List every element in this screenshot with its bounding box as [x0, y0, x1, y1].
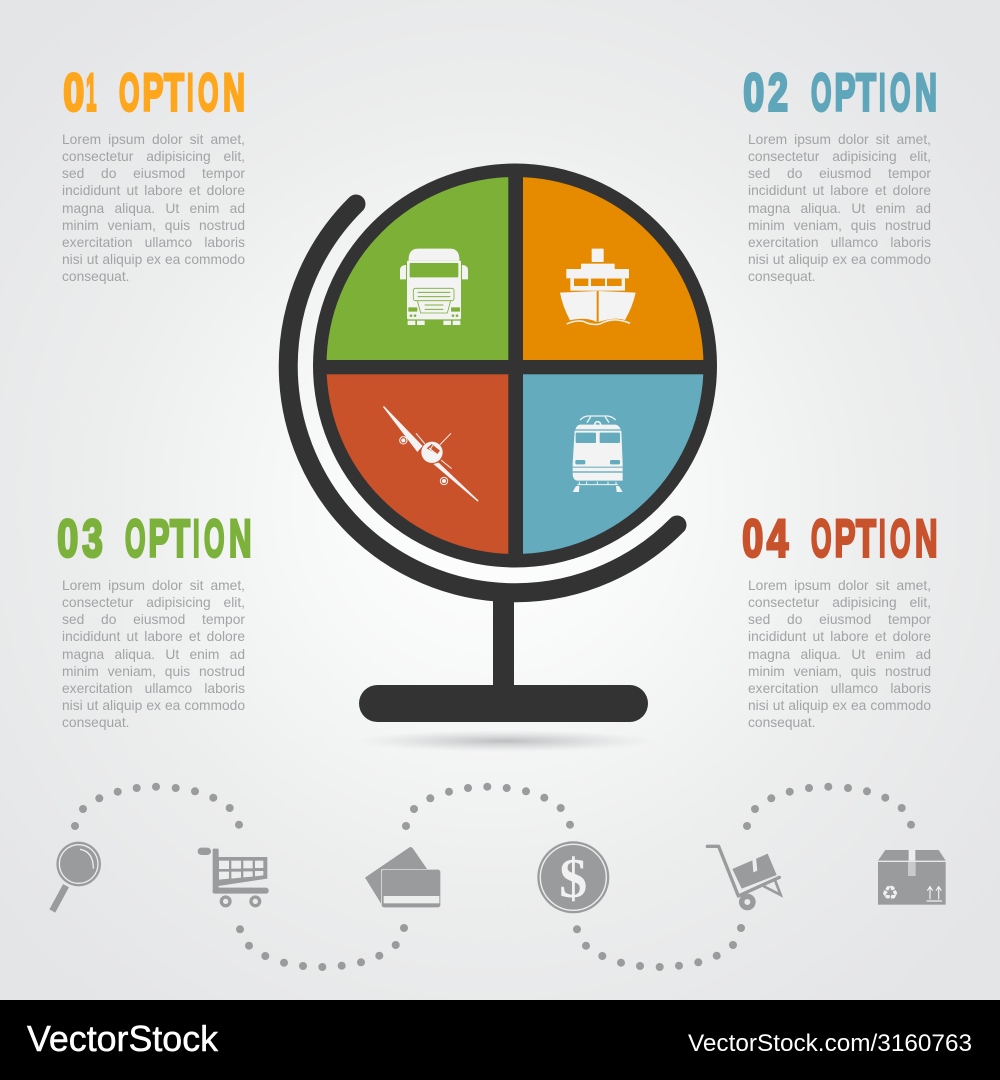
heading: 03 option: [57, 510, 251, 568]
heading: 02 option: 2: [768, 64, 788, 122]
text block: option 04: consectetur adipisicing elit,: [748, 595, 931, 610]
heading: 02 option: P: [834, 64, 856, 122]
text block: option 04: incididunt ut labore et dolore: [748, 629, 931, 644]
globe base: [359, 685, 648, 722]
heading: 02 option: T: [856, 64, 876, 122]
text block: option 04: nisi ut aliquip ex ea commodo: [748, 698, 931, 713]
heading: 04 option: N: [915, 510, 938, 568]
heading: 04 option: 0: [742, 510, 763, 568]
heading: 03 option: O: [204, 510, 224, 568]
icon: cardboard box: [878, 850, 946, 905]
heading: 02 option: I: [879, 64, 886, 122]
text block: option 02: [748, 132, 931, 284]
heading: 02 option: O: [890, 64, 910, 122]
text block: option 04: exercitation ullamco laboris: [748, 681, 931, 696]
text block: option 04: Lorem ipsum dolor sit amet,: [748, 578, 931, 593]
text block: option 02: nisi ut aliquip ex ea commodo: [748, 252, 931, 267]
heading: 01 option: O: [119, 64, 140, 122]
icon: cardboard box: ♻: [881, 881, 899, 904]
text block: option 03: [62, 578, 245, 730]
quadrants: [320, 170, 713, 564]
heading: 02 option: 0: [743, 64, 764, 122]
icon: shopping cart: [198, 848, 269, 906]
heading: 01 option: [63, 64, 245, 122]
icon: truck: [400, 249, 468, 325]
text block: option 02: consequat.: [748, 269, 816, 284]
icon: plane: [383, 406, 479, 502]
heading: 01 option: N: [223, 64, 245, 122]
icon: magnifier: [52, 842, 101, 911]
text block: option 01: sed do eiusmod tempor: [62, 166, 245, 181]
text block: option 01: magna aliqua. Ut enim ad: [62, 201, 245, 216]
quadrant: blue: [523, 374, 713, 564]
icon: credit cards: [365, 847, 441, 908]
text block: option 01: incididunt ut labore et dolore: [62, 183, 245, 198]
heading: 01 option: I: [187, 64, 194, 122]
text block: option 02: exercitation ullamco laboris: [748, 235, 931, 250]
footer: brand: VectorStock: [27, 1018, 219, 1059]
heading: 03 option: P: [148, 510, 170, 568]
text block: option 03: Lorem ipsum dolor sit amet,: [62, 578, 245, 593]
quadrant: green: [320, 170, 508, 360]
paths: dotted connectors: [71, 783, 915, 971]
text block: option 02: consectetur adipisicing elit,: [748, 149, 931, 164]
heading: 03 option: O: [125, 510, 146, 568]
text block: option 03: incididunt ut labore et dolore: [62, 629, 245, 644]
heading: 02 option: [743, 64, 937, 122]
heading: 01 option: 0: [63, 64, 84, 122]
text block: option 02: sed do eiusmod tempor: [748, 166, 931, 181]
text block: option 01: exercitation ullamco laboris: [62, 235, 245, 250]
globe disc: [313, 164, 717, 568]
text block: option 04: sed do eiusmod tempor: [748, 612, 931, 627]
heading: 03 option: 3: [82, 510, 103, 568]
text block: option 03: consectetur adipisicing elit,: [62, 595, 245, 610]
heading: 01 option: P: [142, 64, 164, 122]
text block: option 01: [62, 132, 245, 284]
heading: 01 option: 1: [86, 64, 96, 122]
heading: 04 option: T: [856, 510, 876, 568]
heading: 02 option: N: [915, 64, 937, 122]
text block: option 02: minim veniam, quis nostrud: [748, 218, 931, 233]
text block: option 03: magna aliqua. Ut enim ad: [62, 647, 245, 662]
text block: option 03: exercitation ullamco laboris: [62, 681, 245, 696]
text block: option 01: minim veniam, quis nostrud: [62, 218, 245, 233]
text block: option 01: consequat.: [62, 269, 130, 284]
icon: dollar coin: [537, 841, 609, 913]
text block: option 02: incididunt ut labore et dolore: [748, 183, 931, 198]
text block: option 03: nisi ut aliquip ex ea commodo: [62, 698, 245, 713]
quadrant: red: [320, 374, 508, 564]
heading: 01 option: T: [164, 64, 184, 122]
text block: option 03: sed do eiusmod tempor: [62, 612, 245, 627]
text block: option 03: consequat.: [62, 715, 130, 730]
globe stand arc: [288, 204, 677, 593]
globe: [288, 164, 717, 722]
quadrant: orange: [523, 170, 713, 360]
icon: ship: [560, 249, 636, 324]
globe stem: [493, 598, 514, 690]
text block: option 04: [748, 578, 931, 730]
heading: 04 option: O: [811, 510, 832, 568]
heading: 03 option: T: [170, 510, 190, 568]
heading: 04 option: O: [890, 510, 910, 568]
heading: 04 option: P: [834, 510, 856, 568]
text block: option 02: Lorem ipsum dolor sit amet,: [748, 132, 931, 147]
heading: 04 option: 4: [767, 510, 789, 568]
heading: 03 option: 0: [57, 510, 78, 568]
icon: dollar coin: $: [559, 848, 587, 910]
text block: option 04: minim veniam, quis nostrud: [748, 664, 931, 679]
footer: image id: VectorStock.com/3160763: [688, 1030, 972, 1057]
text block: option 01: consectetur adipisicing elit,: [62, 149, 245, 164]
icon: hand truck: [707, 846, 781, 908]
text block: option 01: Lorem ipsum dolor sit amet,: [62, 132, 245, 147]
heading: 03 option: N: [229, 510, 252, 568]
text block: option 04: magna aliqua. Ut enim ad: [748, 647, 931, 662]
heading: 02 option: O: [811, 64, 832, 122]
globe shadow: [355, 730, 655, 752]
heading: 04 option: I: [879, 510, 886, 568]
heading: 01 option: O: [198, 64, 218, 122]
icon: train: [573, 416, 623, 492]
text block: option 01: nisi ut aliquip ex ea commodo: [62, 252, 245, 267]
text block: option 04: consequat.: [748, 715, 816, 730]
heading: 03 option: I: [193, 510, 200, 568]
heading: 04 option: [742, 510, 938, 568]
text block: option 03: minim veniam, quis nostrud: [62, 664, 245, 679]
footer bar: [0, 1000, 1000, 1080]
text block: option 02: magna aliqua. Ut enim ad: [748, 201, 931, 216]
